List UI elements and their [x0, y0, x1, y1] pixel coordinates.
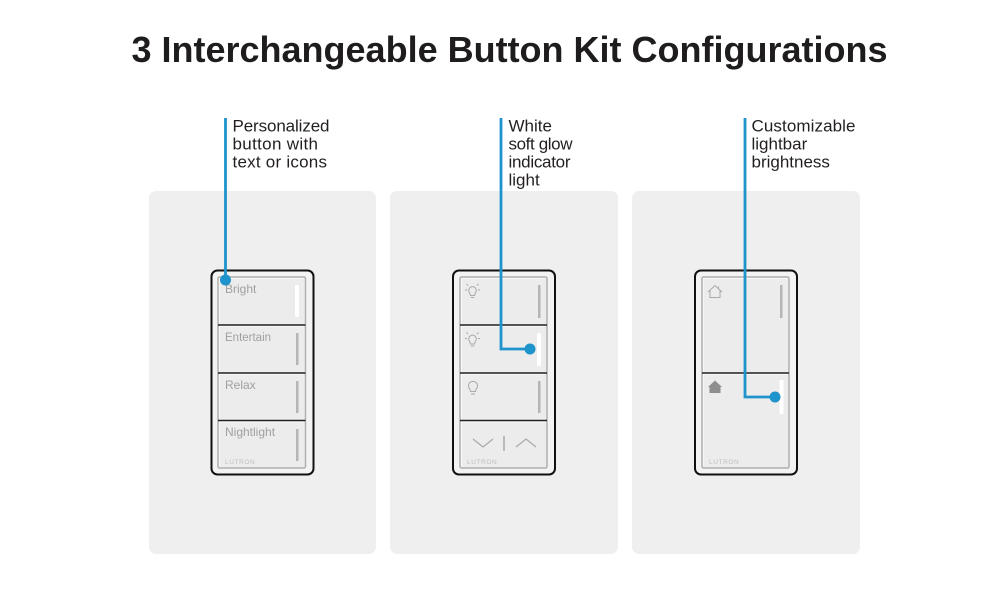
caption: lightbar	[752, 134, 808, 154]
panel: two button wallplate	[632, 191, 860, 554]
logo: LUTRON	[467, 459, 497, 466]
button labels: Entertain	[225, 332, 271, 344]
callout: indicator light	[501, 116, 573, 354]
caption: brightness	[752, 152, 830, 172]
button labels: Nightlight	[225, 425, 276, 439]
caption	[752, 116, 856, 172]
indicator lights	[537, 285, 541, 413]
icon: outline house	[708, 286, 722, 298]
logo: LUTRON	[225, 459, 255, 466]
caption: Customizable	[752, 116, 856, 136]
logo: LUTRON	[709, 459, 739, 466]
switch frame 2	[453, 270, 555, 474]
caption	[508, 116, 573, 190]
icon: bulb	[468, 381, 478, 394]
button labels	[225, 282, 276, 439]
button labels: Bright	[225, 282, 257, 296]
callout: lightbar brightness	[745, 116, 856, 402]
switch frame 3	[695, 270, 797, 474]
caption: light	[508, 170, 540, 190]
title: 3 Interchangeable Button Kit Configurations	[131, 29, 888, 70]
icon: glowing bulb 2	[465, 332, 480, 346]
leader line	[745, 118, 780, 402]
panel: text button wallplate	[149, 191, 376, 554]
caption: soft glow	[508, 134, 573, 154]
button labels: Relax	[225, 378, 256, 392]
indicator lights	[295, 285, 299, 461]
leader line	[501, 118, 536, 354]
caption	[232, 116, 330, 172]
caption: indicator	[508, 152, 571, 172]
icon: filled house	[708, 380, 722, 393]
caption: button with	[232, 134, 318, 154]
switch frame 1	[212, 270, 314, 474]
caption: Personalized	[232, 116, 330, 136]
indicator lights	[780, 285, 784, 414]
icon: glowing bulb	[465, 284, 480, 298]
leader line	[220, 118, 231, 286]
callout: personalized button	[220, 116, 330, 286]
icon: down and up chevrons	[473, 436, 536, 451]
caption: text or icons	[232, 152, 327, 172]
caption: White	[508, 116, 552, 136]
panel: icon button wallplate	[390, 191, 618, 554]
